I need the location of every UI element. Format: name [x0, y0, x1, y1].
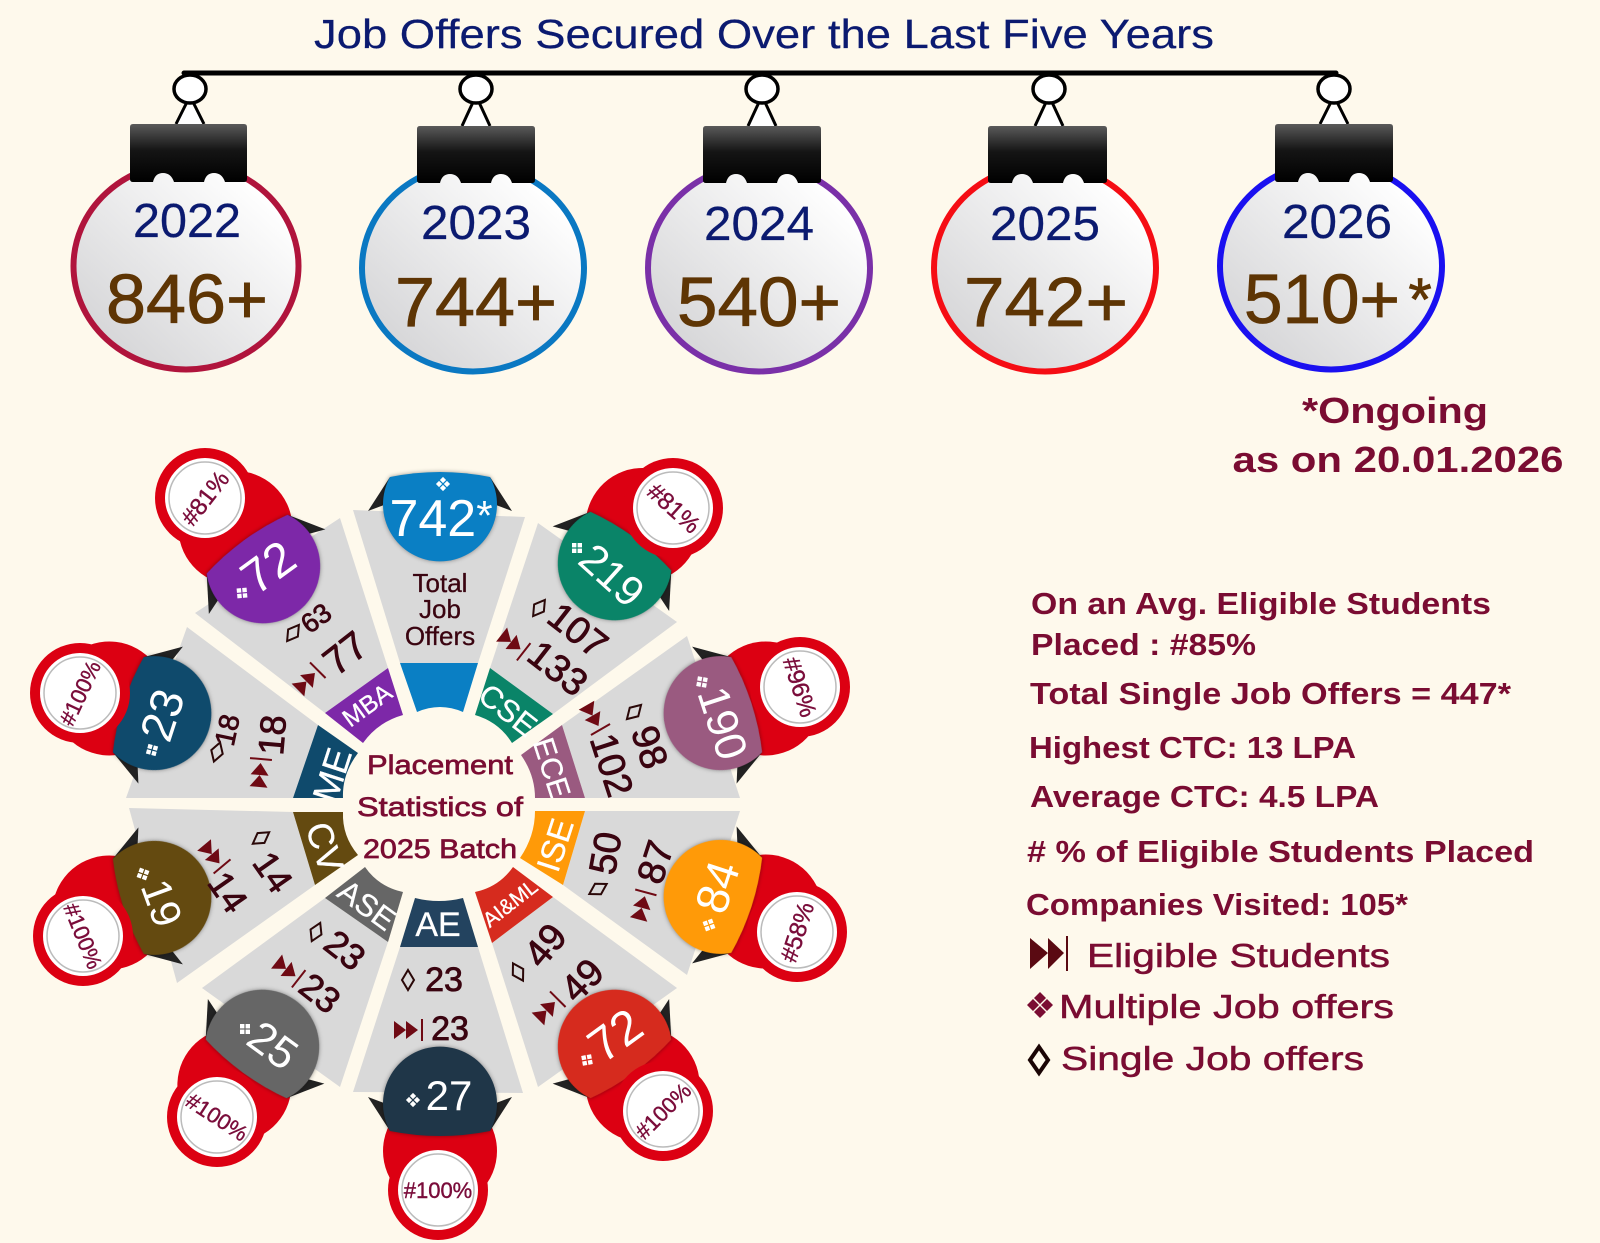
wheel centre text	[357, 750, 524, 864]
offers: 25	[238, 1012, 307, 1080]
footnote: ongoing	[1232, 390, 1564, 480]
eligible students	[270, 953, 348, 1022]
badge	[30, 643, 130, 743]
eligible students: 102	[581, 729, 641, 802]
wheel centre text: Statistics of	[357, 792, 524, 822]
tab	[400, 898, 478, 947]
icon dots	[581, 1054, 593, 1066]
icon dots	[696, 676, 708, 688]
tab	[325, 668, 403, 743]
ornament: 2023: 2023	[421, 197, 531, 250]
badge: #81%	[642, 478, 705, 539]
wedge	[563, 811, 740, 975]
wedge	[562, 636, 740, 798]
icon dots	[406, 1093, 420, 1107]
badge: #100%	[54, 657, 106, 729]
eligible students	[577, 700, 641, 802]
cap	[644, 612, 842, 799]
badge	[167, 1067, 267, 1167]
caption: Offers	[405, 621, 475, 651]
cap	[144, 440, 355, 655]
legend: eligible students	[1030, 936, 1390, 974]
ornament: 2026: 510+	[1244, 260, 1400, 338]
cap	[368, 1047, 512, 1208]
cap	[368, 472, 512, 561]
wedge	[353, 947, 523, 1093]
offers: 19	[132, 873, 192, 933]
badge: #100%	[404, 1178, 472, 1203]
offers: 23	[129, 683, 195, 747]
ornament: 2022: 846+	[106, 260, 268, 338]
badge: #100%	[58, 900, 107, 973]
single offers: 50	[582, 829, 631, 878]
icon dots	[146, 744, 158, 756]
single offers: 23	[317, 922, 373, 979]
cap	[523, 958, 734, 1173]
single offers: 63	[295, 597, 337, 639]
footnote: ongoing: *Ongoing	[1302, 390, 1488, 431]
icon dots	[572, 543, 582, 553]
department tab: AE	[415, 906, 461, 944]
wheel centre text: Placement	[367, 750, 514, 780]
badge	[750, 637, 850, 737]
single offers: 98	[622, 721, 675, 774]
sector: Total Job Offers	[353, 472, 525, 712]
tab	[400, 663, 478, 712]
sector: ECE	[521, 612, 850, 803]
badge: #81%	[176, 466, 235, 531]
wedge	[126, 627, 318, 798]
offers: 84	[684, 855, 750, 919]
badge: #58%	[776, 899, 820, 966]
badge	[623, 458, 723, 558]
single offers: 23	[425, 961, 463, 999]
tab	[293, 725, 358, 798]
key statistics text: Average CTC: 4.5 LPA	[1030, 779, 1379, 814]
ornament: 2024: 540+	[677, 263, 841, 341]
legend: eligible students: Eligible Students	[1087, 937, 1390, 974]
ornament: 2026	[1220, 75, 1442, 370]
eligible students	[530, 951, 613, 1027]
sector: AE	[353, 898, 523, 1240]
eligible students: 14	[200, 864, 256, 920]
wedge	[353, 510, 525, 663]
cap	[143, 958, 354, 1173]
offers: 219	[570, 534, 654, 616]
key statistics text	[1026, 586, 1534, 922]
single offers: 49	[516, 916, 576, 976]
wedge	[492, 897, 677, 1087]
wedge	[195, 518, 388, 713]
tab	[475, 668, 553, 743]
badge: #100%	[630, 1078, 696, 1144]
ornament: 2025: 742+	[964, 263, 1128, 341]
offers: 190	[687, 681, 757, 766]
caption	[405, 568, 475, 651]
sector: ISE	[520, 811, 847, 998]
single offers	[282, 597, 337, 645]
icon dots	[240, 1024, 250, 1034]
badge	[33, 886, 133, 986]
eligible students: 87	[630, 836, 683, 889]
tab	[325, 867, 403, 942]
badge: #96%	[777, 654, 821, 721]
ornament: 2023: 744+	[395, 263, 557, 341]
tab	[293, 812, 358, 885]
single offers: 107	[539, 595, 615, 667]
eligible students	[495, 626, 595, 705]
legend: multiple job offers: Multiple Job offers	[1059, 988, 1394, 1025]
ornament: 2023	[362, 75, 584, 372]
tab	[520, 811, 585, 885]
cap	[33, 612, 231, 799]
single offers: 14	[245, 844, 301, 900]
ornament: 2026: *	[1408, 266, 1432, 333]
icon dots	[703, 919, 715, 931]
total value: *	[476, 492, 493, 539]
key statistics text: Companies Visited: 105*	[1026, 887, 1409, 922]
key statistics text: Placed : #85%	[1031, 627, 1256, 662]
footnote: ongoing: as on 20.01.2026	[1232, 439, 1564, 480]
icon dots	[237, 588, 247, 598]
department tab: ISE	[529, 814, 581, 876]
ornament: 2022: 2022	[133, 195, 241, 248]
sector: AI&ML	[475, 867, 734, 1173]
department tab: MBA	[337, 678, 398, 733]
offers: 72	[579, 999, 653, 1073]
eligible students: 23	[431, 1010, 469, 1048]
eligible students: 23	[292, 965, 348, 1022]
key statistics text: Highest CTC: 13 LPA	[1029, 730, 1356, 765]
sector: MBA	[144, 440, 403, 743]
ornament: 2025: 2025	[990, 198, 1100, 251]
department tab: ASE	[331, 873, 402, 938]
key statistics text: # % of Eligible Students Placed	[1027, 834, 1534, 869]
cap	[33, 812, 231, 999]
eligible students	[394, 1010, 469, 1048]
eligible students	[290, 624, 376, 698]
eligible students	[628, 836, 683, 922]
sector: CSE	[472, 437, 734, 744]
hanging rod	[184, 70, 1336, 76]
legend: single job offers: Single Job offers	[1061, 1040, 1364, 1077]
ornament: 2026: 2026	[1282, 196, 1392, 249]
cap	[523, 437, 734, 652]
badge	[613, 1061, 713, 1161]
single offers	[402, 961, 463, 999]
sector: ASE	[143, 867, 403, 1173]
tab	[475, 867, 553, 943]
ornament: 2025	[934, 75, 1156, 372]
badge	[388, 1140, 488, 1240]
ornament: 2022	[74, 75, 298, 370]
tab	[521, 725, 585, 798]
wedge	[129, 808, 315, 983]
ornament: 2024	[648, 75, 870, 372]
badge	[155, 448, 255, 548]
single offers	[582, 829, 631, 899]
sector: ME	[30, 612, 360, 807]
eligible students	[248, 713, 294, 788]
icon dots	[137, 868, 149, 880]
offers: 27	[426, 1072, 472, 1119]
department tab: CV	[298, 817, 352, 877]
caption: Total	[413, 568, 467, 598]
eligible students: 77	[315, 624, 376, 684]
key statistics text: Total Single Job Offers = 447*	[1030, 676, 1512, 711]
wedge	[202, 898, 388, 1087]
department tab: ECE	[526, 734, 576, 803]
caption: Job	[419, 594, 461, 624]
total value: 742	[389, 490, 476, 548]
wedge	[490, 523, 677, 714]
eligible students	[196, 838, 256, 920]
department tab: AI&ML	[479, 875, 542, 932]
eligible students: 49	[553, 951, 613, 1011]
eligible students: 133	[519, 633, 595, 705]
department tab: ME	[304, 743, 360, 807]
badge: #100%	[181, 1088, 252, 1146]
eligible students: 18	[250, 713, 294, 757]
ornament: 2024: 2024	[704, 198, 814, 251]
title: Job Offers Secured Over the Last Five Years	[314, 11, 1214, 57]
offers: 72	[232, 531, 306, 605]
sector: CV	[33, 808, 358, 999]
wheel centre text: 2025 Batch	[363, 834, 517, 864]
department tab: CSE	[472, 677, 544, 744]
key statistics text: On an Avg. Eligible Students	[1031, 586, 1491, 621]
cap	[644, 811, 842, 998]
single offers: 18	[209, 712, 246, 749]
badge	[747, 882, 847, 982]
icon: multiple offers	[436, 477, 450, 491]
